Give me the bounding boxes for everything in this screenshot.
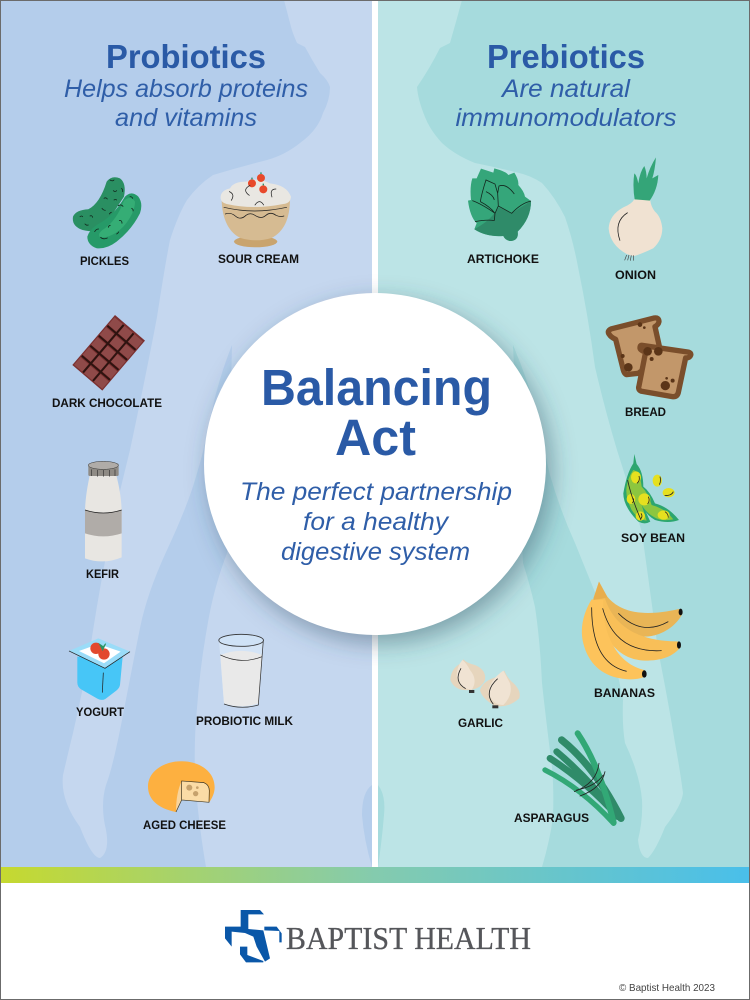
icon: pickles [73,177,141,248]
panel: center circle [204,293,546,635]
heading: probiotics: Probiotics [106,38,266,75]
label: onion: ONION [615,270,656,282]
subtitle [240,478,512,566]
subtitle: digestive system [281,538,470,566]
label: soy bean: SOY BEAN [621,533,685,545]
panel: prebiotics background [378,0,750,867]
heading: probiotics: and vitamins [115,104,257,132]
icon: sour cream [221,172,291,247]
label: kefir: KEFIR [86,569,120,581]
icon: garlic [450,659,520,708]
heading: prebiotics [456,38,676,132]
icon: cross and florida [225,910,282,962]
title [261,359,492,466]
label: artichoke: ARTICHOKE [467,254,539,266]
label: pickles: PICKLES [80,256,129,268]
center divider [372,0,378,867]
icon: bread [608,318,691,397]
subtitle: for a healthy [303,508,450,536]
label: sour cream: SOUR CREAM [218,254,299,266]
heading: prebiotics: Are natural [500,75,632,103]
icon: aged cheese [148,761,215,812]
footer [0,883,750,1000]
label: yogurt: YOGURT [76,707,124,719]
icon: yogurt [69,638,130,700]
subtitle: The perfect partnership [240,478,512,506]
label: bananas: BANANAS [594,688,655,700]
heading: probiotics: Helps absorb proteins [64,75,308,103]
logo: baptist health: BAPTIST HEALTH [286,920,531,956]
label: garlic: GARLIC [458,718,503,730]
heading: prebiotics: immunomodulators [456,104,676,132]
title: Balancing [261,359,492,416]
label: probiotic milk: PROBIOTIC MILK [196,716,294,728]
heading: probiotics [64,38,308,132]
label: aged cheese: AGED CHEESE [143,820,226,832]
label: bread: BREAD [625,407,666,419]
copyright: © Baptist Health 2023 [619,982,715,994]
gradient bar [0,867,750,883]
icon: bananas [582,582,683,679]
icon: onion [609,157,662,261]
label: dark chocolate: DARK CHOCOLATE [52,398,162,410]
heading: prebiotics: Prebiotics [487,38,645,75]
icon: dark chocolate [72,315,145,391]
label: asparagus: ASPARAGUS [514,813,589,825]
circle shadow [210,301,552,643]
icon: soy bean [623,454,679,523]
logo: baptist health [225,910,531,962]
icon: artichoke [468,168,531,241]
icon: kefir [85,461,122,561]
panel: probiotics background [0,0,372,867]
icon: asparagus [545,733,621,823]
title: Act [335,409,416,466]
icon: probiotic milk [219,634,263,707]
